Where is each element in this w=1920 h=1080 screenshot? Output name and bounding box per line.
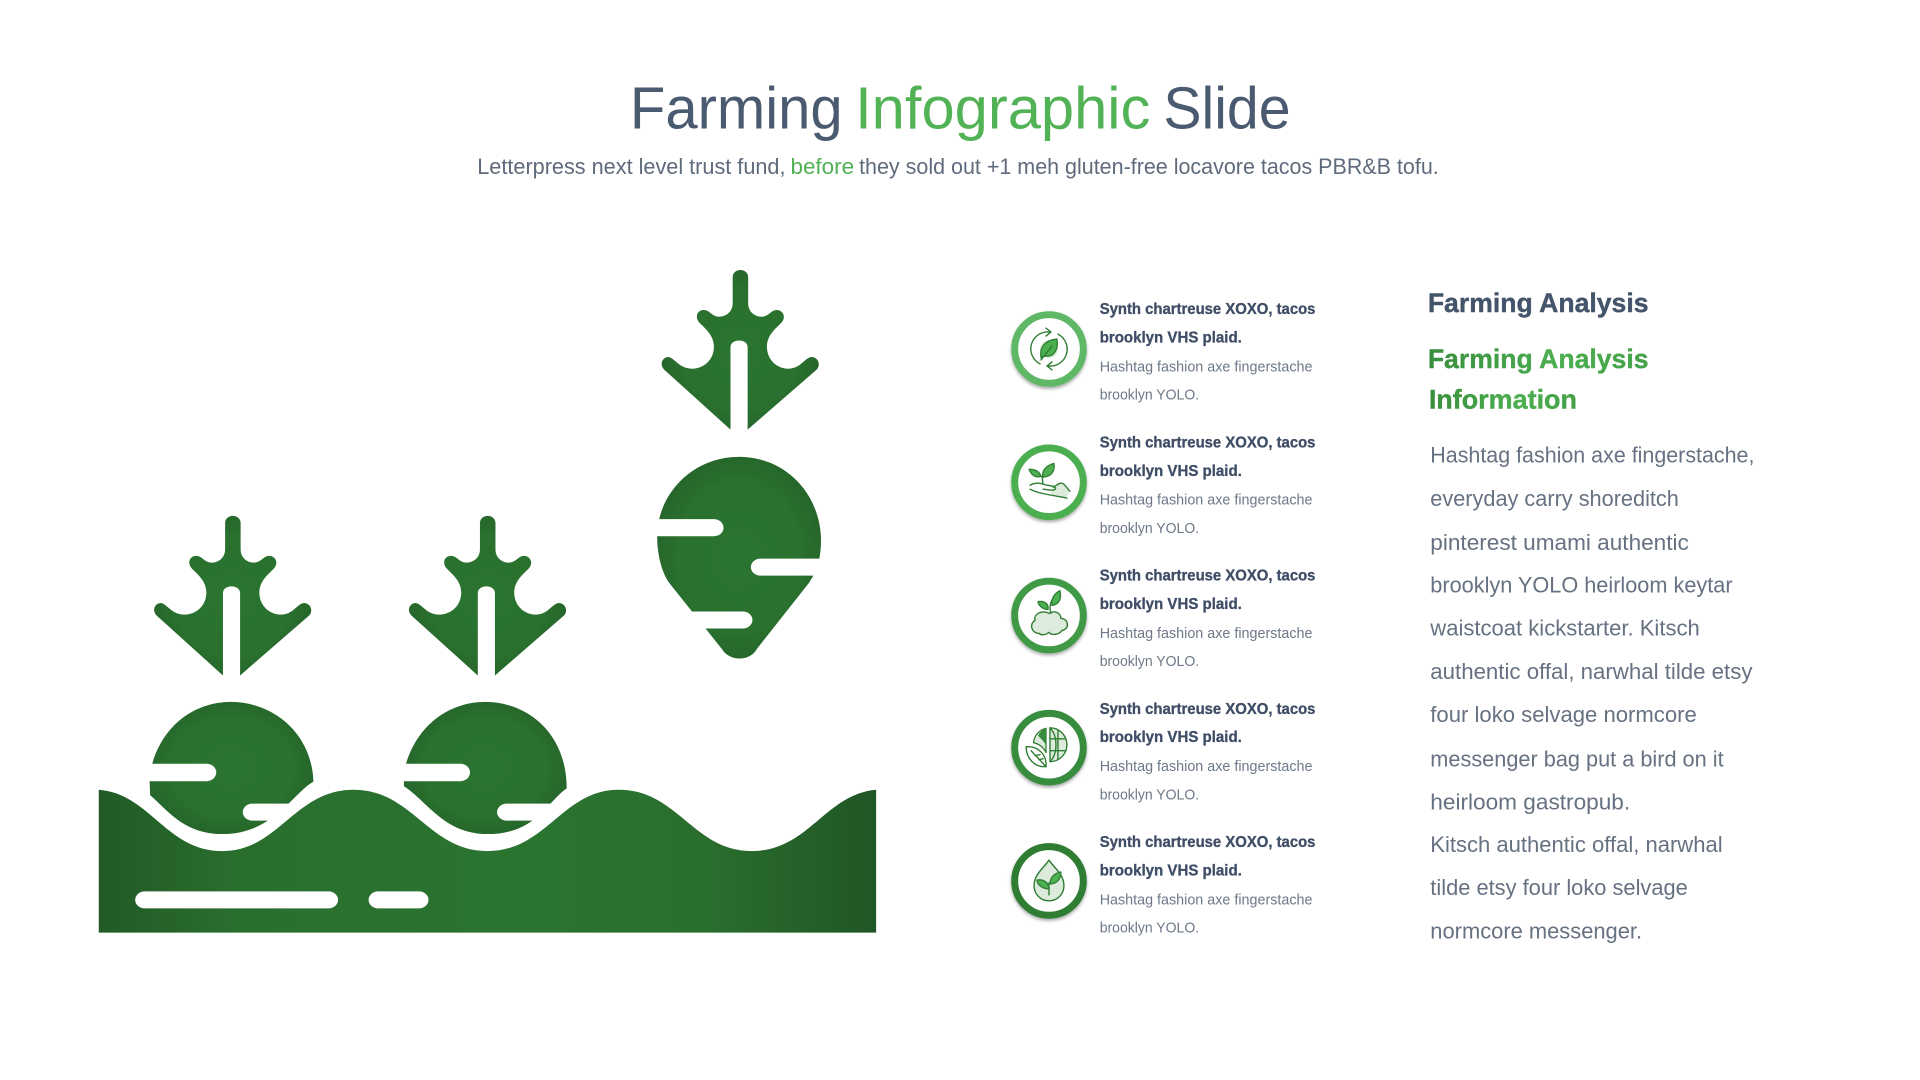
list text 4: Hashtag fashion axe fingerstache	[1100, 759, 1312, 775]
slide content	[99, 74, 1754, 944]
list text 1	[1100, 301, 1315, 404]
icon: recycle leaf	[1015, 315, 1083, 383]
body paragraph: normcore messenger.	[1430, 919, 1642, 944]
beet root: middle	[396, 702, 567, 834]
icon: globe and leaf	[1015, 713, 1083, 782]
icon: water drop with sprout	[1015, 847, 1083, 915]
body paragraph: four loko selvage normcore	[1430, 702, 1697, 727]
subtitle: before	[790, 154, 854, 179]
list text 3	[1100, 568, 1315, 670]
body paragraph: waistcoat kickstarter. Kitsch	[1429, 615, 1700, 640]
icon: sprout on cloud	[1015, 581, 1083, 650]
body paragraph	[1429, 442, 1754, 944]
list text 4: brooklyn VHS plaid.	[1100, 729, 1242, 746]
list text 3: Synth chartreuse XOXO, tacos	[1100, 568, 1315, 585]
list text 1: brooklyn YOLO.	[1100, 388, 1199, 404]
body paragraph: everyday carry shoreditch	[1430, 486, 1679, 511]
list text 5: brooklyn VHS plaid.	[1100, 862, 1242, 879]
title	[630, 74, 1291, 141]
subtitle: they sold out +1 meh gluten-free locavore tacos PBR&B tofu.	[859, 154, 1439, 179]
list text 5: brooklyn YOLO.	[1100, 921, 1199, 937]
icon: plant in hand	[1015, 448, 1083, 517]
title: Infographic	[855, 74, 1150, 141]
body paragraph: Hashtag fashion axe fingerstache,	[1430, 442, 1754, 467]
body paragraph: brooklyn YOLO heirloom keytar	[1430, 573, 1733, 598]
list text 4: brooklyn YOLO.	[1100, 787, 1199, 803]
list text 2: Hashtag fashion axe fingerstache	[1100, 493, 1312, 509]
soil with furrows	[99, 790, 876, 933]
illustration: three beets growing from soil	[98, 270, 876, 933]
list text 5: Hashtag fashion axe fingerstache	[1100, 892, 1312, 908]
list text 3: Hashtag fashion axe fingerstache	[1100, 626, 1312, 642]
body paragraph: Kitsch authentic offal, narwhal	[1430, 832, 1723, 857]
beet root: left	[139, 702, 313, 834]
beet root: raised	[651, 457, 830, 658]
subheading: Farming Analysis Information: Information	[1429, 385, 1577, 415]
list item 2	[1015, 434, 1315, 537]
title: Farming	[630, 74, 843, 141]
list item 5	[1015, 834, 1315, 937]
list text 1: Synth chartreuse XOXO, tacos	[1100, 301, 1315, 318]
list text 2: brooklyn VHS plaid.	[1100, 463, 1242, 480]
list item 1	[1015, 301, 1315, 404]
list text 1: brooklyn VHS plaid.	[1100, 330, 1242, 347]
subheading: Farming Analysis Information: Farming Analysis	[1428, 344, 1649, 374]
heading: Farming Analysis: Farming Analysis	[1428, 288, 1649, 318]
list item 4	[1015, 701, 1315, 803]
list text 5	[1100, 834, 1315, 937]
list text 4: Synth chartreuse XOXO, tacos	[1100, 701, 1315, 718]
beet leaves: left	[154, 516, 311, 675]
list text 4	[1100, 701, 1315, 803]
list text 2: brooklyn YOLO.	[1100, 521, 1199, 537]
body paragraph: messenger bag put a bird on it	[1430, 747, 1724, 772]
body paragraph: heirloom gastropub.	[1430, 789, 1630, 814]
title: Slide	[1163, 74, 1291, 141]
beet leaves: raised	[662, 270, 819, 430]
list text 3: brooklyn YOLO.	[1100, 654, 1199, 670]
subtitle	[477, 154, 1439, 179]
subtitle: Letterpress next level trust fund,	[477, 154, 786, 179]
list text 2	[1100, 434, 1315, 537]
list item 3	[1015, 568, 1315, 670]
beet leaves: middle	[409, 516, 566, 675]
list text 3: brooklyn VHS plaid.	[1100, 596, 1242, 613]
subheading: Farming Analysis Information	[1428, 344, 1649, 415]
list text 1: Hashtag fashion axe fingerstache	[1100, 359, 1312, 375]
list text 2: Synth chartreuse XOXO, tacos	[1100, 434, 1315, 451]
body paragraph: authentic offal, narwhal tilde etsy	[1430, 659, 1753, 684]
list text 5: Synth chartreuse XOXO, tacos	[1100, 834, 1315, 851]
body paragraph: pinterest umami authentic	[1430, 530, 1689, 555]
body paragraph: tilde etsy four loko selvage	[1430, 875, 1688, 900]
